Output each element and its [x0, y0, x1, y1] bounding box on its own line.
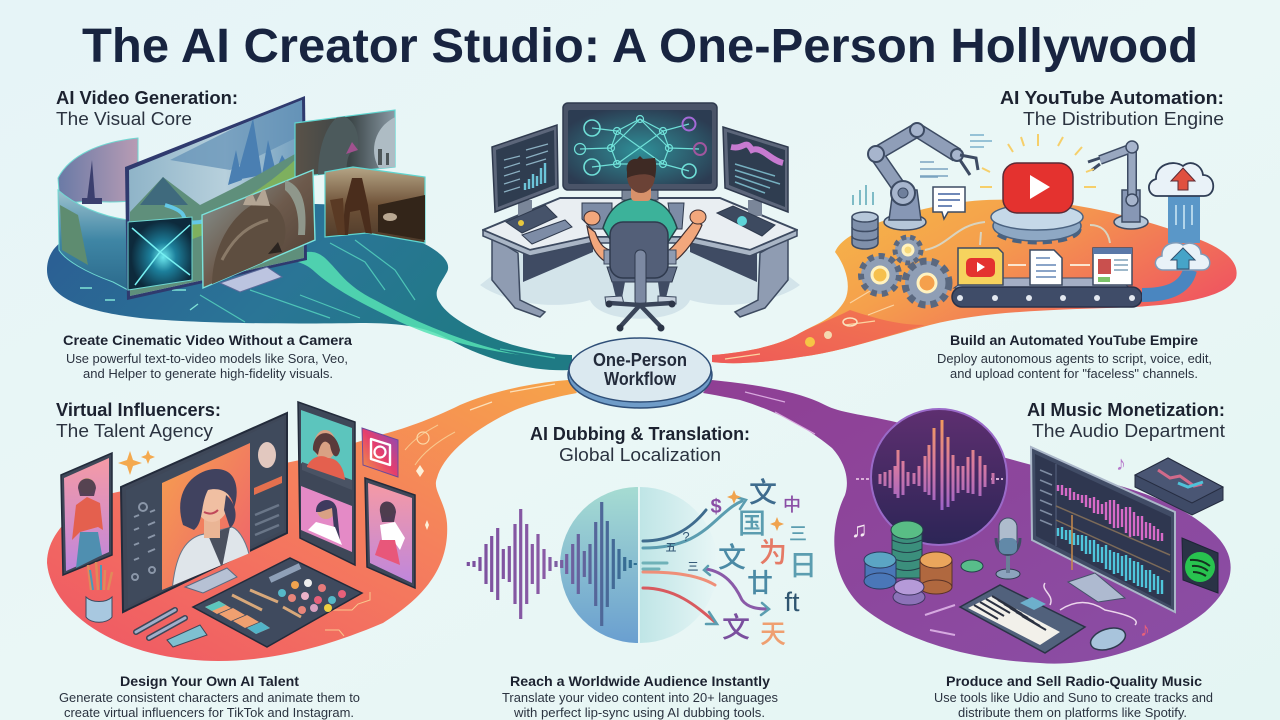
hub: one-person workflow — [568, 338, 712, 408]
dragon panel centre — [202, 170, 315, 288]
hub: one-person workflow: One-Person — [593, 350, 687, 370]
monitor stand — [185, 568, 237, 593]
description: Use tools like Udio and Suno to create tracks and — [934, 691, 1213, 705]
microphone — [996, 518, 1020, 579]
keyboard — [960, 585, 1085, 653]
waveform circle — [856, 409, 1007, 545]
sound waveform — [468, 502, 635, 626]
pens and card — [136, 610, 207, 647]
gears — [861, 237, 949, 305]
panel: AI YouTube automation — [712, 88, 1237, 381]
heading — [56, 88, 238, 129]
creator figure — [584, 156, 706, 263]
description: Create Cinematic Video Without a Camera — [63, 333, 353, 348]
panel: AI music monetization — [703, 380, 1231, 720]
robot arm left — [868, 123, 978, 230]
multilingual characters: 中 — [783, 495, 801, 515]
description: Build an Automated YouTube Empire — [950, 333, 1199, 348]
monitor stand — [1068, 573, 1125, 602]
description: create virtual influencers for TikTok and Instagram. — [64, 706, 354, 720]
multilingual characters: ft — [784, 587, 800, 617]
database — [852, 185, 878, 249]
sparkles and glyphs — [727, 490, 784, 531]
mouse and cable — [1044, 583, 1136, 654]
web page card — [1093, 248, 1132, 285]
multilingual characters: 日 — [789, 550, 817, 581]
multilingual characters: 廿 — [747, 568, 773, 598]
multilingual characters: 文 — [718, 542, 746, 573]
description — [63, 333, 353, 381]
phone right — [365, 478, 415, 588]
music notes: ♫ — [851, 517, 868, 542]
panel: AI video generation — [47, 88, 572, 381]
multilingual characters: 文 — [749, 477, 777, 508]
arrows between cards — [1008, 264, 1090, 266]
half globe — [560, 487, 718, 643]
hub: one-person workflow: Workflow — [604, 369, 677, 389]
energy panel of film strip — [128, 217, 192, 290]
YouTube gear and logo — [980, 134, 1096, 241]
palette tablet — [193, 558, 362, 647]
description — [59, 674, 360, 720]
teal blob and ribbon — [47, 204, 572, 370]
desk devices — [506, 203, 775, 244]
heading — [530, 424, 750, 465]
description: distribute them on platforms like Spotify. — [958, 706, 1187, 720]
main monitor — [125, 96, 307, 300]
multilingual characters: 三 — [688, 561, 698, 573]
pencil cup — [86, 562, 112, 622]
multilingual characters: 三 — [789, 524, 807, 544]
music notes: ♪ — [1116, 453, 1126, 475]
description — [502, 674, 778, 720]
heading: The Distribution Engine — [1023, 109, 1224, 129]
description: Generate consistent characters and animate them to — [59, 691, 360, 705]
heading: Global Localization — [559, 445, 721, 465]
heading: AI Video Generation: — [56, 88, 238, 108]
translation arrows — [643, 497, 769, 624]
chat bubble and code snippets — [920, 135, 992, 219]
description: and Helper to generate high-fidelity visuals. — [83, 367, 333, 381]
heading — [56, 400, 221, 441]
right monitor — [723, 127, 788, 216]
monitor stand — [220, 267, 282, 292]
office chair — [604, 222, 677, 332]
floor shadow — [480, 250, 800, 319]
phone left — [61, 453, 112, 575]
heading: The Visual Core — [56, 109, 192, 129]
curved film strip back — [58, 138, 138, 290]
music monitor — [1031, 447, 1175, 612]
desk — [483, 198, 797, 317]
description: and upload content for "faceless" channels. — [950, 367, 1198, 381]
purple blob and ribbon — [703, 380, 1231, 664]
multilingual characters: 五 — [666, 542, 676, 554]
heading: AI YouTube Automation: — [1000, 88, 1224, 108]
main monitor and editor — [121, 413, 287, 612]
conveyor belt — [952, 278, 1142, 307]
multilingual characters — [666, 477, 817, 649]
tall phone — [298, 402, 355, 565]
dragon panel top — [294, 109, 396, 177]
Spotify icon — [1182, 538, 1218, 593]
description: with perfect lip-sync using AI dubbing tools. — [513, 706, 765, 720]
description: Design Your Own AI Talent — [120, 674, 300, 689]
left monitor — [492, 125, 558, 216]
panel: AI dubbing and translation — [468, 424, 817, 720]
sparkles — [118, 450, 155, 475]
video card — [958, 248, 1003, 285]
title: The AI Creator Studio: A One-Person Hollywood — [82, 20, 1198, 73]
document card — [1030, 250, 1062, 285]
description — [937, 333, 1212, 381]
heading: AI Music Monetization: — [1027, 400, 1225, 420]
multilingual characters: ? — [682, 529, 690, 544]
blue pipe and clouds — [1142, 163, 1213, 295]
orange-pink blob and ribbon — [47, 380, 577, 661]
description: Produce and Sell Radio-Quality Music — [946, 674, 1203, 689]
multilingual characters: 国 — [738, 508, 766, 539]
heading: AI Dubbing & Translation: — [530, 424, 750, 444]
coin stacks — [864, 521, 983, 605]
multilingual characters: 天 — [760, 619, 786, 649]
heading: The Audio Department — [1032, 421, 1225, 441]
multilingual characters: 文 — [722, 612, 750, 643]
description: Use powerful text-to-video models like Sora, Veo, — [66, 352, 348, 366]
description: Translate your video content into 20+ languages — [502, 691, 778, 705]
heading: Virtual Influencers: — [56, 400, 221, 420]
music notes: ♪ — [1140, 619, 1150, 641]
heading — [1027, 400, 1225, 441]
multilingual characters: 为 — [759, 537, 787, 568]
description: Deploy autonomous agents to script, voice, edit, — [937, 352, 1212, 366]
panel: virtual influencers — [47, 380, 577, 720]
Instagram icon — [362, 428, 398, 477]
panel: centre creator desk — [480, 103, 800, 332]
flow arrows — [925, 222, 1110, 250]
orange blob and ribbon — [712, 200, 1237, 363]
description — [934, 674, 1213, 720]
multilingual characters: $ — [710, 496, 722, 518]
heading: The Talent Agency — [56, 421, 213, 441]
description: Reach a Worldwide Audience Instantly — [510, 674, 771, 689]
heading — [1000, 88, 1224, 129]
robot arm right — [1088, 141, 1148, 229]
album stack — [1135, 458, 1223, 515]
warriors panel — [325, 167, 425, 243]
music notes — [851, 453, 1150, 641]
centre monitor — [563, 103, 717, 200]
